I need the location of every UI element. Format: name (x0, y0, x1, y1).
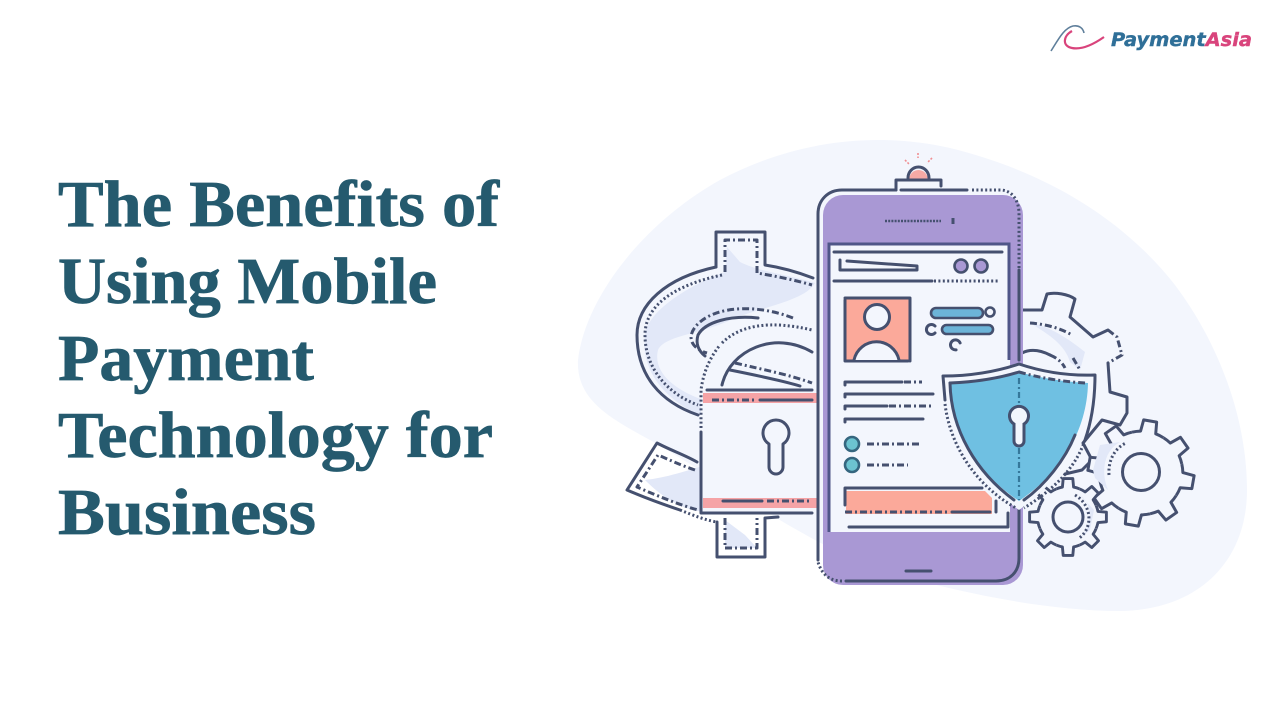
profile photo (845, 298, 911, 361)
title: Technology for (58, 399, 493, 472)
phone screen (830, 244, 1010, 532)
dollar shading (644, 247, 815, 548)
shield keyhole (1009, 406, 1028, 446)
icon: medium gear (1086, 418, 1196, 528)
panel: phone (818, 153, 1023, 585)
speaker (885, 220, 941, 222)
logo: PaymentAsia: PaymentAsia (1111, 29, 1252, 51)
salmon button (845, 488, 996, 514)
icon: padlock (701, 345, 817, 513)
home button (906, 570, 931, 572)
background blob (578, 140, 1247, 611)
text lines (845, 382, 933, 422)
title: Payment (58, 322, 314, 395)
header bars (834, 252, 1002, 281)
title: The Benefits of (58, 168, 500, 241)
icon: alarm light (896, 153, 941, 190)
title (58, 168, 500, 549)
blue pills (926, 308, 994, 351)
title: Using Mobile (58, 245, 437, 318)
illustration: mobile payment security (578, 140, 1247, 611)
icon: large gear (1022, 293, 1127, 474)
title: Business (58, 476, 316, 549)
icon: shield (943, 364, 1095, 510)
icon: small gear (1030, 479, 1106, 555)
phone body (823, 195, 1023, 585)
keyhole (763, 420, 789, 474)
icon: dollar sign (627, 232, 815, 557)
list bullets (845, 437, 921, 472)
logo: PaymentAsia (1051, 26, 1252, 51)
